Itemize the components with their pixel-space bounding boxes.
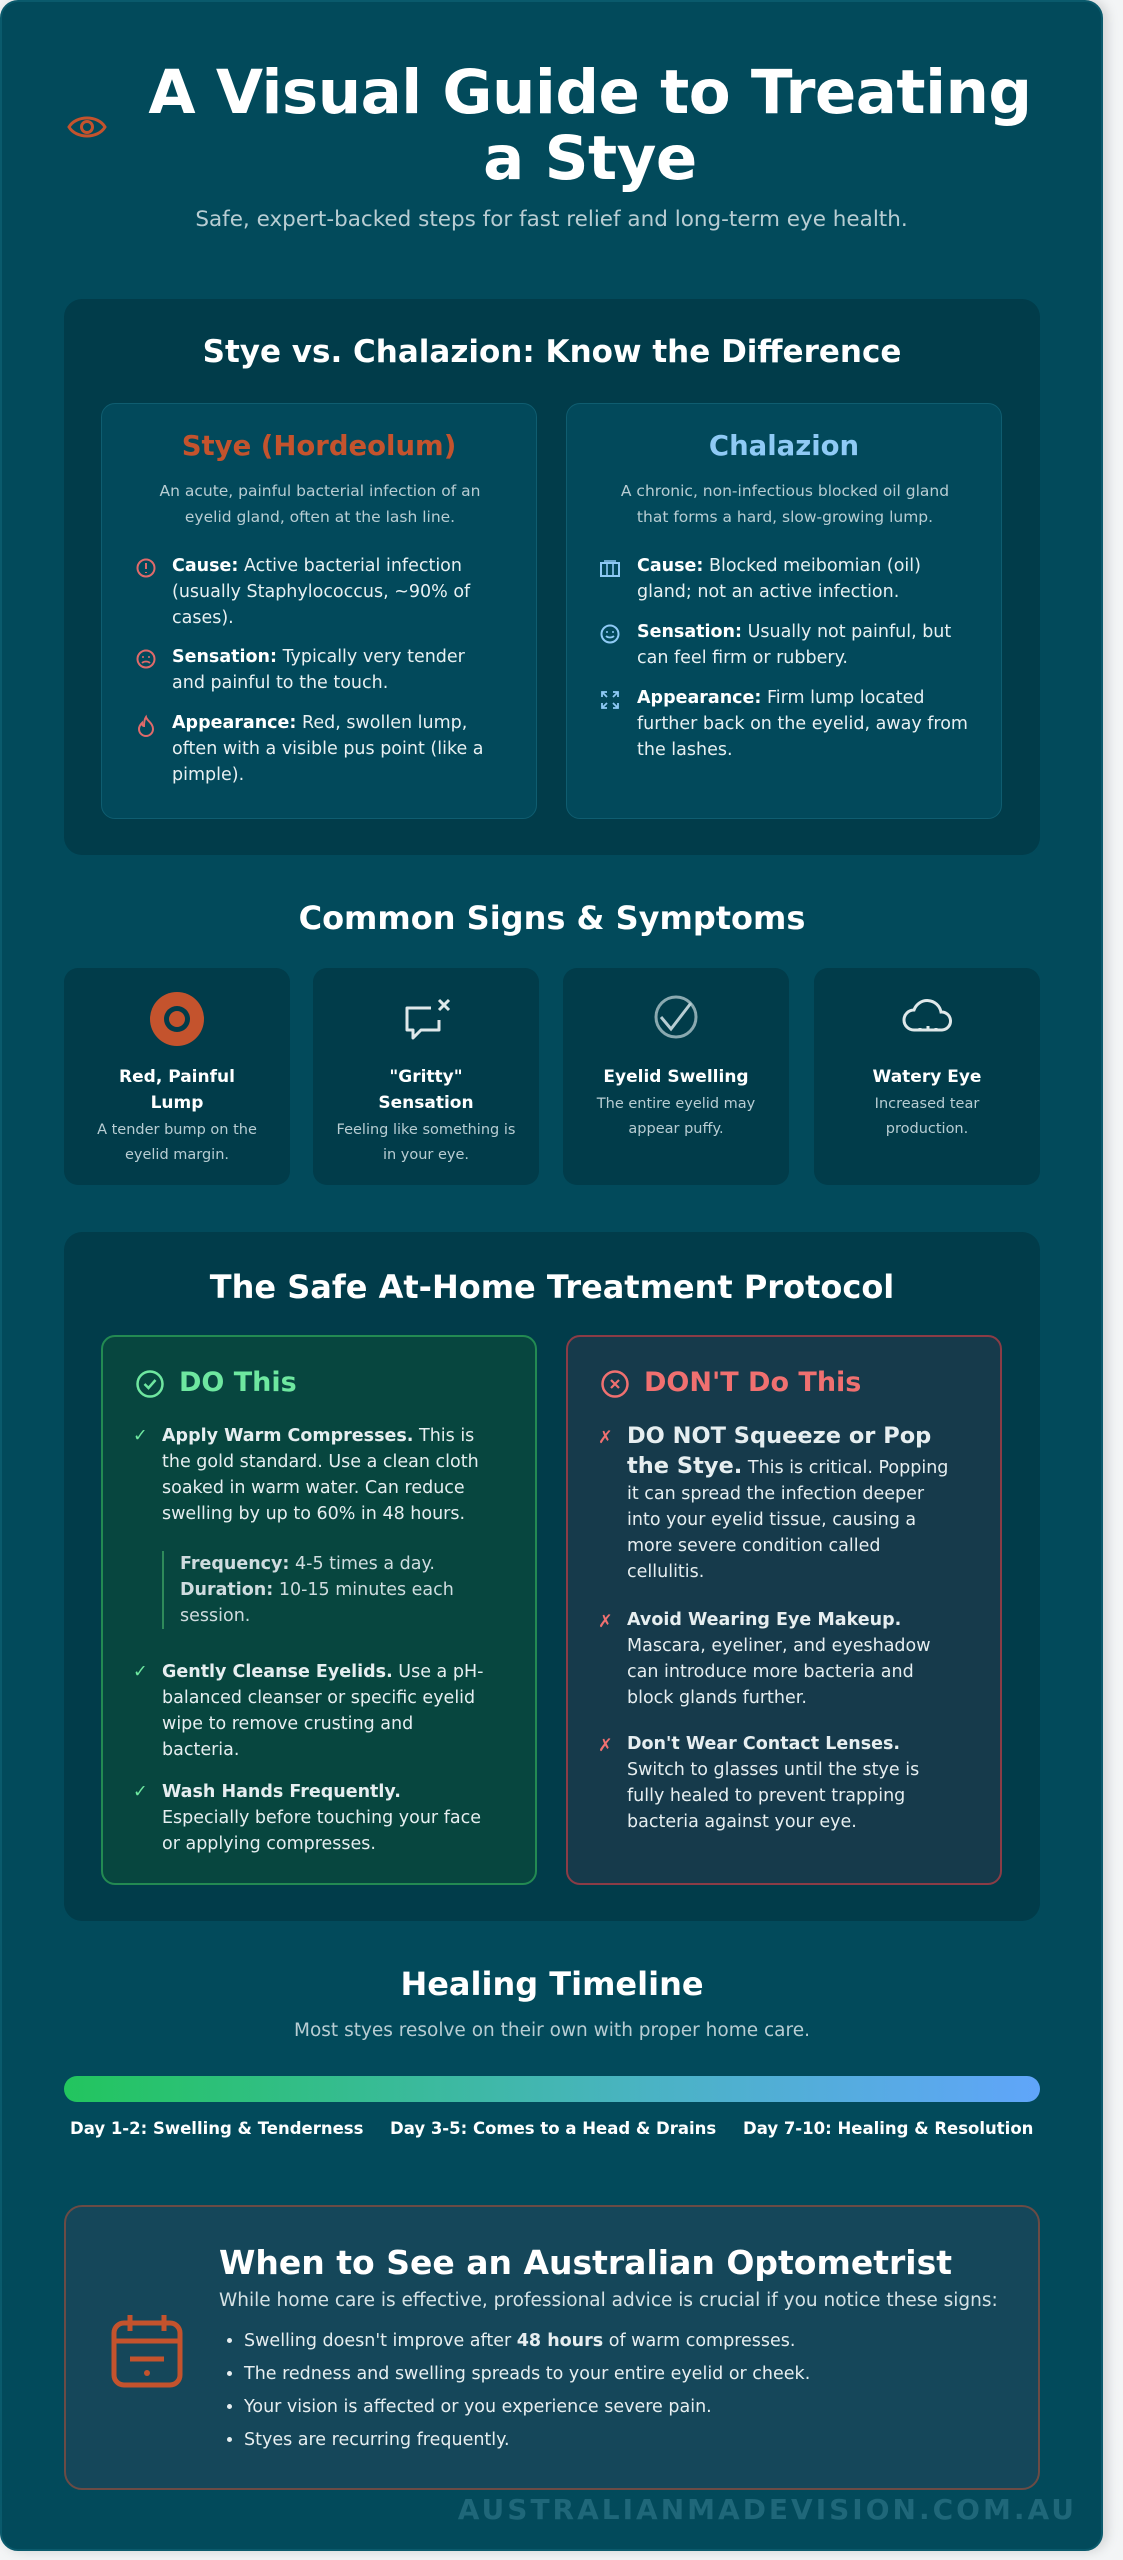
icon: gland (600, 560, 620, 577)
bullet list: Swelling doesn't improve after 48 hours of warm compresses. (244, 2331, 795, 2351)
box: do this: Apply Warm Compresses. This is the gold standard. Use a clean cloth soaked in warm water. Can reduce swelling by up to 60% in 48 hours. (162, 1426, 479, 1524)
icon: check circle (136, 1370, 164, 1398)
symptom: swelling: Eyelid Swelling (603, 1067, 749, 1087)
title: A Visual Guide to Treating (148, 57, 1032, 128)
icon: smile (600, 624, 620, 644)
symptom: gritty (313, 968, 539, 1185)
box: do this: Wash Hands Frequently. Especially before touching your face or applying compresses. (162, 1782, 481, 1854)
symptom: watery: Watery Eye (873, 1067, 981, 1087)
box: don't do this: DO NOT Squeeze or Pop the Stye. This is critical. Popping it can spread the infection deeper into your eyelid tissue, causing a more severe condition called cellulitis. (627, 1423, 948, 1582)
icon: expand (601, 691, 619, 709)
stye description: An acute, painful bacterial infection of an eyelid gland, often at the lash line. (160, 482, 480, 526)
item: sensation: Sensation: Typically very tender and painful to the touch. (172, 647, 465, 693)
heading: The Safe At-Home Treatment Protocol (210, 1268, 894, 1306)
symptom: gritty: Feeling like something is in your eye. (337, 1122, 515, 1163)
bullet list (227, 2331, 810, 2450)
symptom: gritty: "Gritty" (389, 1067, 463, 1087)
icon: sad face (136, 650, 156, 668)
icon: flame (138, 714, 154, 737)
symptom: red lump: Red, Painful (119, 1067, 235, 1087)
dont item: contacts: ✗ (598, 1736, 613, 1756)
chalazion description: A chronic, non-infectious blocked oil gland that forms a hard, slow-growing lump. (621, 482, 949, 526)
icon: calendar (112, 2315, 182, 2388)
item: cause: Cause: Blocked meibomian (oil) gland; not an active infection. (637, 556, 921, 602)
symptom: watery: Increased tear production. (875, 1096, 979, 1137)
icon: alert (136, 558, 156, 578)
heading: symptoms: Common Signs & Symptoms (299, 899, 805, 937)
icon: x circle (601, 1370, 629, 1398)
symptom: red lump (64, 968, 290, 1185)
timeline labels (70, 2119, 1033, 2138)
icon: eye (67, 116, 107, 138)
optometrist intro: While home care is effective, professional advice is crucial if you notice these signs: (219, 2290, 998, 2311)
bullet list: Styes are recurring frequently. (244, 2430, 510, 2450)
box: do this: Gently Cleanse Eyelids. Use a pH-balanced cleanser or specific eyelid wipe to remove crusting and bacteria. (162, 1662, 483, 1760)
card: chalazion (566, 403, 1002, 819)
box: don't do this: Avoid Wearing Eye Makeup. Mascara, eyeliner, and eyeshadow can introduce more bacteria and block glands further. (627, 1610, 931, 1708)
heading: healing timeline: Healing Timeline (400, 1965, 704, 2003)
dont item: makeup: ✗ (598, 1612, 613, 1632)
bullet list: The redness and swelling spreads to your entire eyelid or cheek. (244, 2364, 810, 2384)
title (148, 57, 1032, 194)
panel: treatment protocol (64, 1232, 1040, 1921)
frequency block: Frequency: 4-5 times a day. (180, 1554, 435, 1574)
item: appearance: Appearance: Firm lump located further back on the eyelid, away from the lashes. (637, 688, 968, 760)
symptom: red lump: A tender bump on the eyelid margin. (97, 1122, 257, 1163)
icon: cloud (902, 999, 952, 1032)
frequency block (162, 1551, 502, 1629)
symptom: swelling: The entire eyelid may appear puffy. (597, 1096, 755, 1137)
item: sensation: Sensation: Usually not painful, but can feel firm or rubbery. (637, 622, 951, 668)
icon: message x (406, 999, 450, 1040)
symptom: watery (814, 968, 1040, 1185)
item: cause: Cause: Active bacterial infection (usually Staphylococcus, ~90% of cases). (172, 556, 470, 628)
frequency block: Duration: 10-15 minutes each session. (180, 1580, 454, 1626)
timeline labels: Day 1-2: Swelling & Tenderness (70, 2119, 363, 2138)
do item: warm compresses: ✓ (133, 1426, 148, 1446)
panel: optometrist (64, 2205, 1040, 2490)
subtitle: Safe, expert-backed steps for fast relief and long-term eye health. (195, 207, 908, 232)
timeline labels: Day 7-10: Healing & Resolution (743, 2119, 1033, 2138)
heading: Stye vs. Chalazion: Know the Difference (203, 334, 901, 370)
dont title: DON'T Do This (644, 1367, 861, 1398)
title: a Stye (483, 123, 697, 194)
bullet list: Your vision is affected or you experience severe pain. (244, 2397, 712, 2417)
do item: cleanse: ✓ (133, 1662, 148, 1682)
box: don't do this (566, 1335, 1002, 1885)
icon: swollen circle (654, 996, 698, 1038)
do item: wash hands: ✓ (133, 1782, 148, 1802)
stye title: Stye (Hordeolum) (182, 430, 456, 462)
icon: target (150, 992, 204, 1046)
symptom: red lump: Lump (151, 1093, 203, 1113)
watermark: AUSTRALIANMADEVISION.COM.AU (458, 2493, 1077, 2526)
card: stye (101, 403, 537, 819)
item: appearance: Appearance: Red, swollen lump, often with a visible pus point (like a pimple). (172, 713, 484, 785)
timeline subtitle: Most styes resolve on their own with proper home care. (294, 2020, 810, 2041)
timeline bar (64, 2076, 1040, 2102)
panel: stye vs chalazion (64, 299, 1040, 855)
do title: DO This (179, 1367, 297, 1398)
symptom: gritty: Sensation (378, 1093, 474, 1113)
symptom: swelling (563, 968, 789, 1185)
chalazion title: Chalazion (709, 430, 859, 462)
box: don't do this: Don't Wear Contact Lenses. Switch to glasses until the stye is fully healed to prevent trapping bacteria against your eye. (627, 1734, 919, 1832)
optometrist title: When to See an Australian Optometrist (219, 2243, 952, 2282)
timeline labels: Day 3-5: Comes to a Head & Drains (390, 2119, 716, 2138)
dont item: squeeze: ✗ (598, 1428, 613, 1448)
box: do this (101, 1335, 537, 1885)
